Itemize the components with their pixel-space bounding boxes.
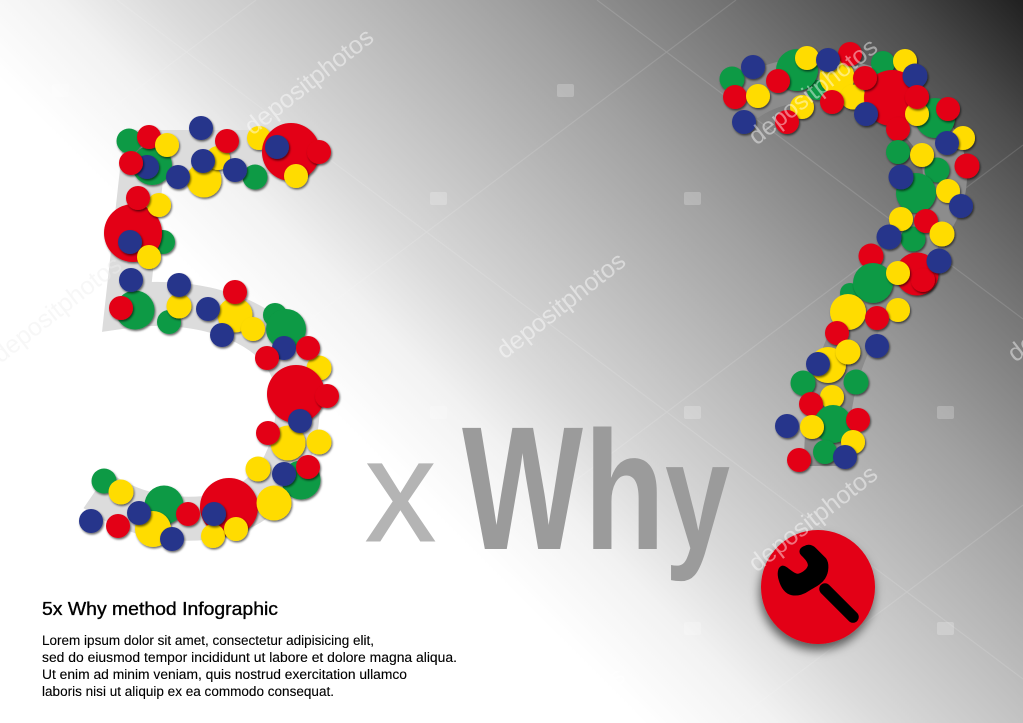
dots of the 5 [79, 116, 339, 551]
dots of the question mark [720, 42, 980, 472]
watermark text: depositphotos [491, 247, 631, 365]
body text: laboris nisi ut aliquip ex ea commodo consequat. [42, 684, 334, 699]
question mark made of dots [720, 42, 980, 472]
letter W: W [462, 391, 583, 587]
icon: wrench in red circle [761, 530, 875, 644]
grey 5 band [96, 152, 300, 519]
wrench [779, 546, 853, 617]
numeral 5 made of dots [79, 116, 339, 551]
watermark text: depositphotos [743, 460, 883, 578]
watermark camera marks [52, 84, 954, 635]
watermark text: depositphotos [743, 33, 883, 151]
body text: sed do eiusmod tempor incididunt ut labore et dolore magna aliqua. [42, 650, 457, 665]
watermark text: depositphotos [239, 23, 379, 141]
grey question mark band [738, 79, 945, 466]
title: 5x Why method Infographic [42, 599, 278, 619]
heading: x Why [365, 391, 730, 587]
letter y: y [665, 409, 730, 582]
body text: Ut enim ad minim veniam, quis nostrud exercitation ullamco [42, 667, 407, 682]
letter x: x [365, 409, 436, 572]
letter h: h [584, 396, 665, 585]
red circle [761, 530, 875, 644]
body text [42, 633, 457, 699]
body text: Lorem ipsum dolor sit amet, consectetur adipisicing elit, [42, 633, 374, 648]
watermark text: depositphotos [235, 465, 375, 583]
